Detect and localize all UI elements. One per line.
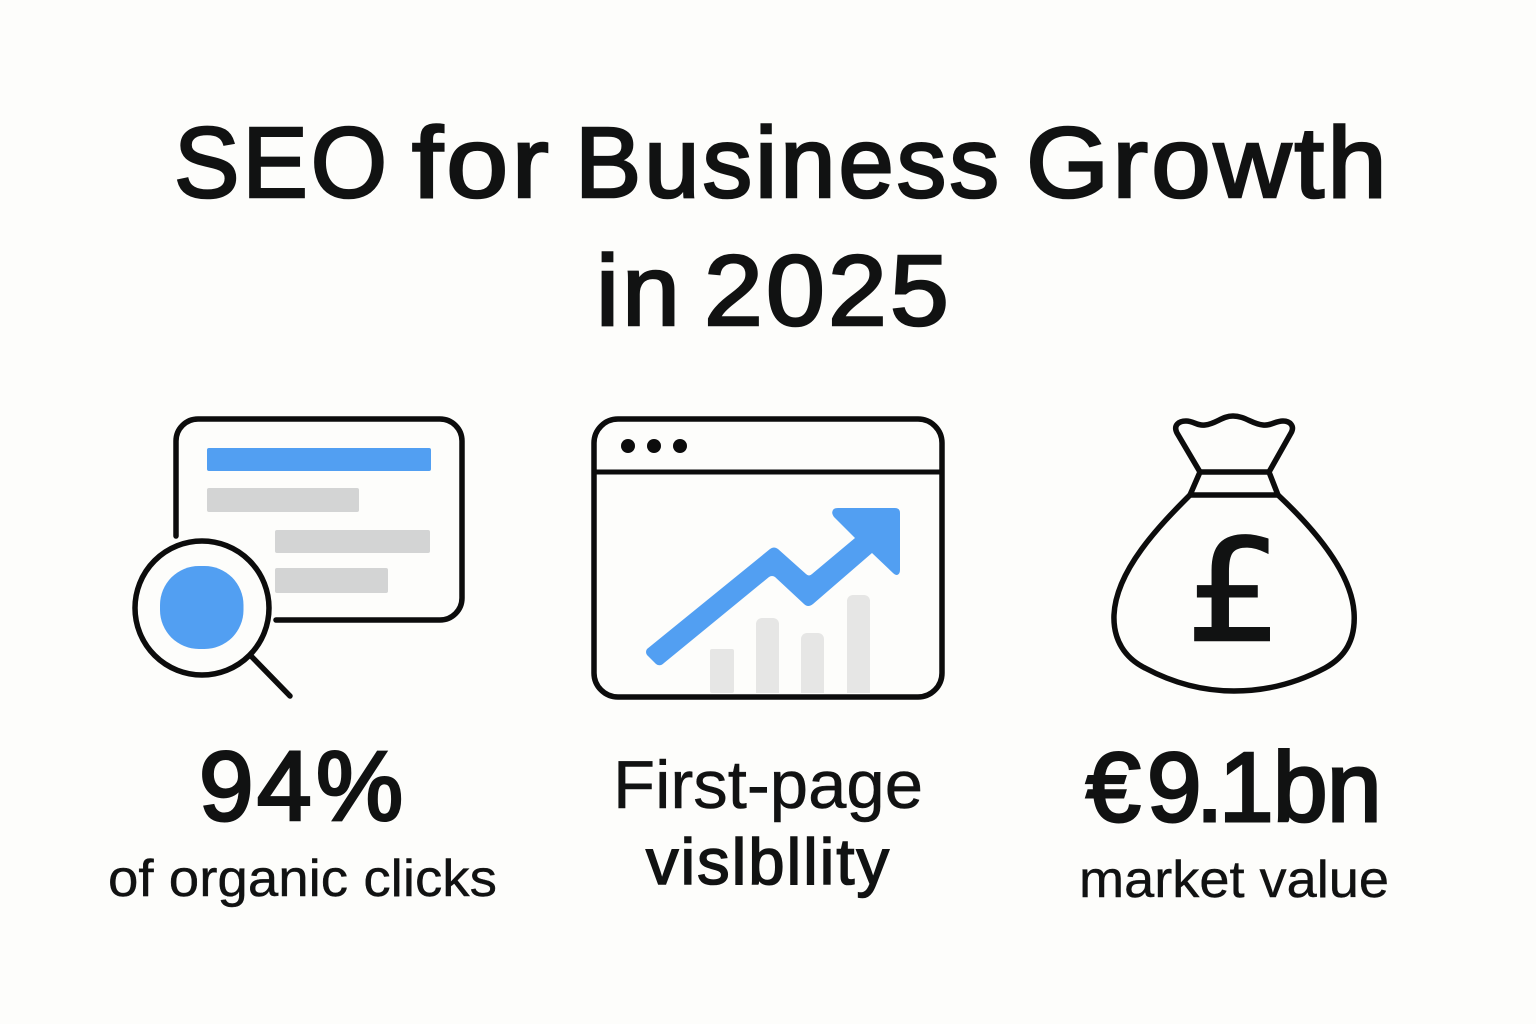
- label: market value: market value: [1079, 851, 1389, 909]
- title: Growth: [1026, 107, 1390, 219]
- panel: first-page visibility: [594, 419, 942, 898]
- stat: £9.1bn: €9.1bn: [1086, 732, 1382, 842]
- label: visibility: vislbllity: [646, 825, 890, 898]
- icon: browser window with rising arrow: [594, 419, 942, 697]
- panel: organic clicks: [108, 419, 497, 908]
- label: First-page: First-page: [613, 747, 923, 823]
- icon: money bag with pound sign: [1114, 416, 1354, 691]
- stat: 94%: 94%: [199, 731, 403, 841]
- icon: search results with magnifying glass: [135, 419, 462, 696]
- label: of organic clicks: of organic clicks: [108, 850, 497, 908]
- title: in: [596, 235, 683, 347]
- title: Business: [575, 107, 1002, 219]
- title: [174, 107, 1390, 347]
- panel: market value: [1079, 416, 1389, 909]
- title: SEO: [174, 107, 390, 219]
- icon: money bag with pound sign: £: [1186, 510, 1282, 674]
- title: for: [412, 107, 552, 219]
- title: 2025: [704, 235, 952, 347]
